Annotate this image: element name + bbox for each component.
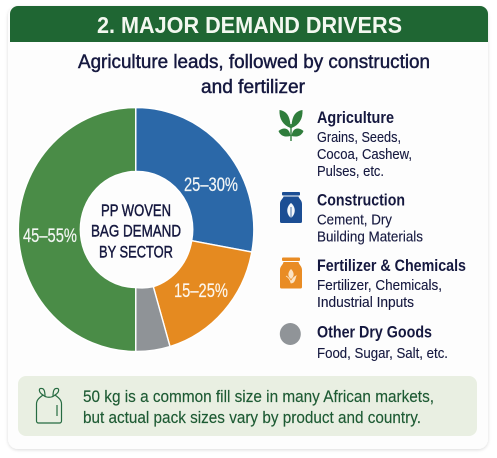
legend: other dry goods: Other Dry Goods <box>317 324 432 342</box>
header banner <box>10 6 488 42</box>
icon: construction bag <box>280 192 302 223</box>
subtitle: Agriculture leads, followed by construction <box>78 52 430 73</box>
legend: agriculture: Pulses, etc. <box>317 164 384 180</box>
subtitle: and fertilizer <box>201 77 306 98</box>
legend: fertilizer & chemicals: Fertilizer, Chemicals, <box>317 278 442 294</box>
center label: BAG DEMAND <box>91 222 181 240</box>
legend: agriculture: Agriculture <box>317 109 394 127</box>
icon: other dry goods circle <box>280 323 301 345</box>
callout <box>18 376 477 436</box>
label: 15–25%: 15–25% <box>174 281 228 302</box>
legend: construction: Building Materials <box>317 230 423 246</box>
legend: agriculture: Grains, Seeds, <box>317 130 401 146</box>
donut chart: PP woven bag demand by sector <box>18 107 254 352</box>
subtitle <box>78 52 430 98</box>
icon: 50 kg bag outline <box>36 388 62 423</box>
title: 2. MAJOR DEMAND DRIVERS <box>97 12 402 38</box>
legend: agriculture <box>317 109 412 180</box>
callout text: 50 kg is a common fill size in many African markets, <box>83 388 434 406</box>
label: 45–55%: 45–55% <box>23 226 77 247</box>
icon: fertilizer bag <box>280 258 302 288</box>
legend: fertilizer & chemicals: Fertilizer & Chemicals <box>317 257 466 275</box>
segment: fertilizer 15–25% <box>153 241 252 346</box>
legend: other dry goods: Food, Sugar, Salt, etc. <box>317 346 448 362</box>
legend: construction <box>317 192 423 246</box>
legend: other dry goods <box>317 324 448 362</box>
segment: construction 25–30% <box>136 107 254 252</box>
center label <box>91 201 181 262</box>
center label: BY SECTOR <box>99 242 173 262</box>
legend: fertilizer & chemicals <box>317 257 466 311</box>
center label: PP WOVEN <box>101 201 171 220</box>
callout text: but actual pack sizes vary by product and country. <box>83 409 421 427</box>
icon: agriculture leaves <box>278 110 304 141</box>
legend: fertilizer & chemicals: Industrial Inputs <box>317 295 414 311</box>
segment: agriculture 45–55% <box>18 108 136 352</box>
segment: other dry goods <box>136 287 170 352</box>
legend: agriculture: Cocoa, Cashew, <box>317 147 412 163</box>
label: 25–30%: 25–30% <box>184 175 238 196</box>
legend: construction: Construction <box>317 192 405 210</box>
legend: construction: Cement, Dry <box>317 212 393 228</box>
callout text <box>83 388 434 427</box>
